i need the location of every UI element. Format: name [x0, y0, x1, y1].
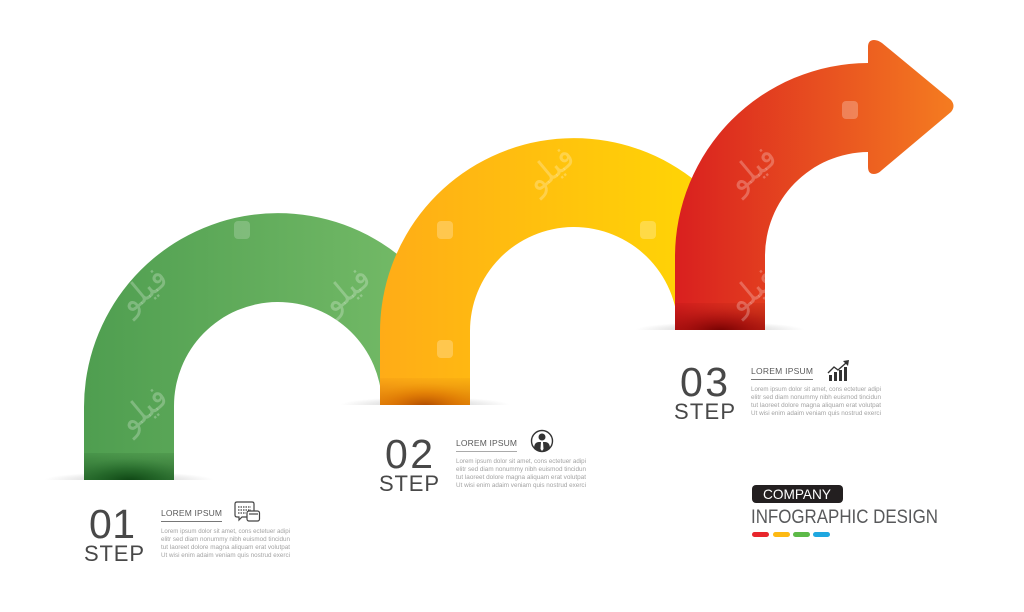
- watermarks: فيلو: [718, 137, 784, 201]
- colour dots: [752, 532, 830, 537]
- step 2 description: Ut wisi enim adaim veniam quis nostrud exerci: [456, 482, 587, 489]
- floor shadow: step 1: [58, 474, 201, 480]
- red arrow: step 3: [675, 40, 954, 330]
- step 1 description: Ut wisi enim adaim veniam quis nostrud exerci: [161, 552, 291, 559]
- step 2 label: STEP: [379, 471, 439, 496]
- icon: growth chart: [828, 360, 849, 381]
- floor shadow: step 3: [648, 324, 792, 330]
- watermarks: [109, 101, 858, 441]
- step 1 description: [161, 528, 291, 559]
- step 3 block: [674, 359, 882, 424]
- step 1 heading: LOREM IPSUM: [161, 508, 222, 518]
- watermarks: فيلو: [718, 258, 784, 322]
- step 1 description: tut laoreet dolore magna aliquam erat volutpat: [161, 544, 290, 551]
- step 2 heading: LOREM IPSUM: [456, 438, 517, 448]
- step 3 number: 03: [680, 359, 728, 405]
- step 2 block: [379, 430, 587, 496]
- step 3 label: STEP: [674, 399, 735, 424]
- icon: business person: [532, 430, 552, 452]
- step 3 heading: LOREM IPSUM: [751, 366, 813, 376]
- company badge: [752, 485, 843, 503]
- step 3 description: elitr sed diam nonummy nibh euismod tincidun: [751, 394, 881, 401]
- step 1 number: 01: [89, 501, 135, 547]
- step 1 block: [84, 501, 291, 566]
- step 2 description: elitr sed diam nonummy nibh euismod tincidun: [456, 466, 586, 473]
- step 2 number: 02: [385, 431, 433, 477]
- green arch: step 1: [84, 213, 397, 480]
- step 3 description: [751, 386, 882, 417]
- step 2 description: Lorem ipsum dolor sit amet, cons ectetuer adipi: [456, 458, 586, 465]
- step 3 description: Ut wisi enim adaim veniam quis nostrud exerci: [751, 410, 882, 417]
- icon: speech bubbles: [235, 502, 260, 521]
- floor shadow: step 2: [353, 400, 497, 405]
- watermarks: فيلو: [516, 137, 582, 201]
- step 1 description: elitr sed diam nonummy nibh euismod tincidun: [161, 536, 290, 543]
- step 2 description: [456, 458, 587, 489]
- watermarks: فيلو: [109, 258, 175, 322]
- step 1 description: Lorem ipsum dolor sit amet, cons ectetuer adipi: [161, 528, 290, 535]
- watermarks: فيلو: [109, 377, 175, 441]
- step 1 label: STEP: [84, 541, 144, 566]
- step 3 description: Lorem ipsum dolor sit amet, cons ectetuer adipi: [751, 386, 881, 393]
- company badge: COMPANY: [763, 486, 832, 502]
- watermarks: فيلو: [312, 258, 378, 322]
- title: infographic design: INFOGRAPHIC DESIGN: [751, 507, 938, 528]
- orange arch: step 2: [380, 138, 692, 405]
- step 2 description: tut laoreet dolore magna aliquam erat volutpat: [456, 474, 586, 481]
- step 3 description: tut laoreet dolore magna aliquam erat volutpat: [751, 402, 881, 409]
